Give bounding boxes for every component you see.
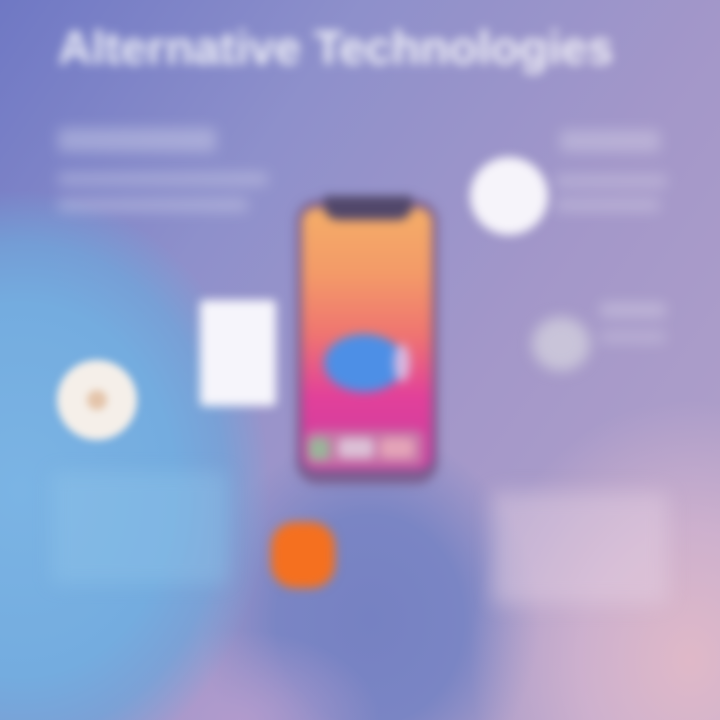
title: Alternative Technologies [58,21,613,74]
icon and text: right middle [527,300,666,376]
icon: white document card [200,300,276,406]
text block: upper left [54,123,268,216]
phone body [296,200,438,484]
text block: upper right [556,126,666,214]
icon: white circle with orange mark [52,354,142,446]
dock icon light [338,438,374,458]
phone dock [306,430,424,466]
phone screen [302,208,432,470]
bubble tail glow [394,344,410,382]
text block: lower left panel [52,472,228,584]
text block: lower right panel [492,492,668,604]
icon: white clock circle [470,157,548,235]
dock icon right [380,438,414,458]
blue message bubble [324,334,404,392]
icon: orange app badge [271,522,335,588]
phone [290,190,444,489]
dock icon [308,438,330,460]
phone notch [324,196,412,220]
